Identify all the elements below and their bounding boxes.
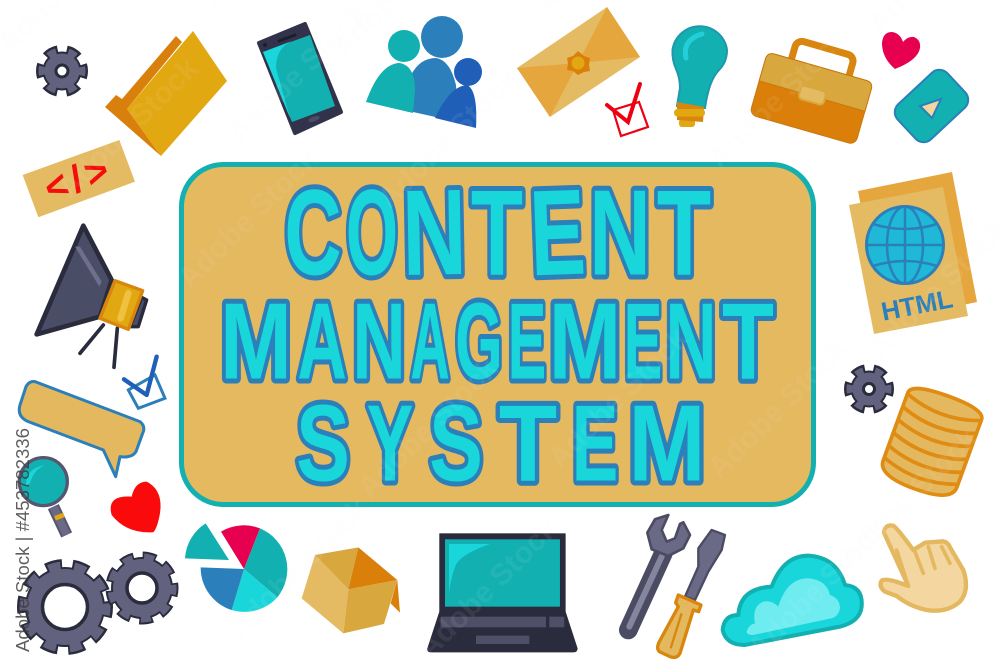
title line: MANAGEMENT: M [549, 280, 621, 402]
title line: SYSTEM: E [572, 383, 618, 504]
title line: SYSTEM: M [628, 382, 706, 504]
icon: medium gear [111, 557, 173, 619]
watermark pattern: Adobe Stock [702, 332, 855, 485]
icon: blue check box [124, 357, 165, 408]
icon: folder [105, 31, 227, 156]
title line: SYSTEM [296, 382, 706, 504]
icon: small gear top left [42, 51, 82, 91]
title line: CONTENT: T [471, 166, 523, 301]
icon: light bulb [672, 26, 727, 127]
title line: MANAGEMENT: M [220, 280, 292, 402]
title line: CONTENT: C [284, 164, 342, 301]
title line: SYSTEM: T [499, 382, 557, 504]
icon: megaphone [37, 226, 147, 367]
icon: cloud [723, 556, 862, 645]
watermark pattern: Adobe Stock [742, 512, 895, 665]
icon: stacked database coins [878, 383, 985, 502]
title line: CONTENT [284, 163, 711, 302]
watermark pattern: Adobe Stock [412, 512, 565, 665]
icon: video play tag [890, 65, 973, 147]
title line: MANAGEMENT: A [297, 282, 347, 402]
icon: small gear right [850, 370, 888, 408]
title line: MANAGEMENT: A [410, 281, 450, 403]
title line: MANAGEMENT: G [455, 280, 503, 402]
icon: pink heart [882, 32, 920, 69]
icon: speech bubble [19, 382, 144, 477]
watermark pattern: Adobe Stock [172, 142, 325, 295]
icon: red check box [607, 84, 648, 136]
watermark pattern: Adobe Stock [352, 352, 505, 505]
title: Content Management System [220, 163, 774, 504]
icon: magnifying glass [19, 458, 67, 535]
icon: briefcase [750, 33, 879, 145]
icon: globe [866, 206, 944, 284]
stock credit vertical text: Adobe Stock | #453782336 [13, 428, 33, 652]
icon: code tag card [23, 140, 135, 217]
panel: central title board [182, 163, 814, 504]
icon: group of people [366, 16, 482, 128]
icon: pointing hand [881, 525, 966, 611]
icon: red heart [111, 482, 161, 532]
title line: MANAGEMENT: E [624, 281, 662, 402]
icon: code tag card: </> [39, 147, 119, 211]
title line: MANAGEMENT [220, 280, 774, 403]
icon: screwdriver [658, 530, 725, 657]
title line: CONTENT: E [528, 165, 588, 302]
title line: MANAGEMENT: N [352, 280, 406, 402]
watermark pattern: Adobe Stock [52, 52, 205, 205]
icon: wrench [628, 515, 690, 630]
icon: sealed envelope [517, 7, 640, 117]
watermark pattern: Adobe Stock [372, 62, 525, 215]
watermark pattern: Adobe Stock [832, 422, 985, 575]
title line: SYSTEM: Y [367, 383, 413, 504]
label: HTML: HTML [879, 283, 955, 327]
icon: smartphone [259, 24, 341, 133]
title line: MANAGEMENT: E [508, 281, 546, 402]
watermark pattern: Adobe Stock [702, 22, 855, 175]
title line: SYSTEM: S [429, 383, 483, 504]
icon: open box [302, 547, 400, 633]
title line: CONTENT: O [346, 164, 398, 301]
icon: HTML document [849, 172, 977, 334]
watermark pattern: Adobe Stock [542, 322, 695, 475]
title line: CONTENT: N [401, 163, 468, 301]
title line: CONTENT: N [589, 166, 651, 301]
icon: laptop [427, 533, 578, 652]
watermark pattern: Adobe Stock [222, 0, 375, 150]
title line: CONTENT: T [657, 164, 711, 301]
title line: MANAGEMENT: T [722, 280, 774, 402]
watermark pattern: Adobe Stock [222, 492, 375, 645]
icon: large gear [24, 566, 106, 648]
title line: MANAGEMENT: N [665, 281, 717, 402]
title line: SYSTEM: S [296, 383, 350, 504]
chart: pie [185, 523, 287, 612]
